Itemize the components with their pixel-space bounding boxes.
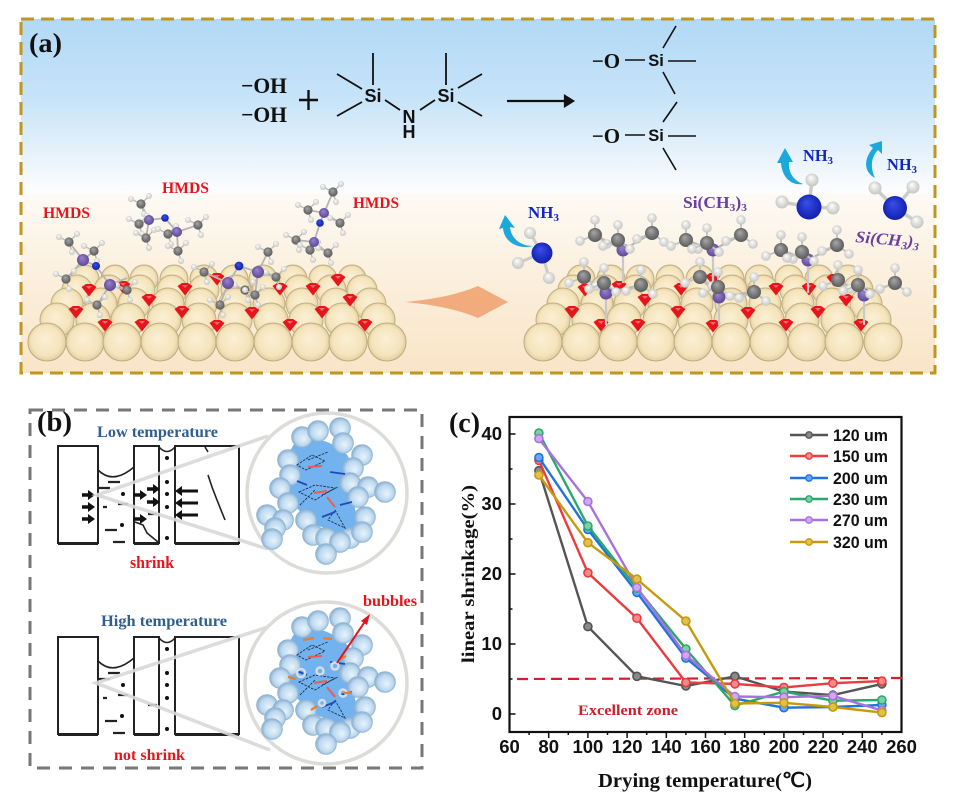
line chart: linear shrinkage vs drying temperature (458, 417, 917, 792)
reaction: HMDS structure: Si (437, 86, 455, 106)
grafted Si(CH3)3 groups, right surface (564, 213, 912, 325)
plot frame and ticks (510, 417, 902, 738)
reaction: surface hydroxyl groups and plus sign: −OH (241, 102, 287, 127)
excellent zone label: Excellent zone (578, 703, 678, 719)
reaction: bonded product structure: Si (648, 127, 664, 145)
y axis numbers: 0 (492, 703, 502, 724)
reaction: bonded product structure: −O (592, 49, 620, 73)
panel a: background and dashed frame (21, 19, 935, 373)
bubbles label: bubbles (363, 593, 417, 610)
NH3 molecule centre (776, 174, 840, 220)
NH3 labels (528, 146, 917, 224)
threshold dashed line (517, 678, 905, 679)
x axis numbers: 200 (768, 736, 799, 757)
Si(CH3)3 label top: ) (735, 193, 741, 212)
reaction: HMDS structure: Si (364, 86, 382, 106)
y axis numbers: 10 (481, 633, 502, 654)
shrink label: shrink (130, 553, 175, 572)
series: 120 um (535, 467, 886, 699)
x axis numbers: 160 (690, 736, 721, 757)
reaction: bonded product structure: Si (648, 52, 664, 70)
x axis numbers: 220 (808, 736, 839, 757)
bubbles arrow (337, 614, 370, 663)
reaction: HMDS structure: N (402, 107, 416, 127)
x axis numbers (499, 736, 917, 757)
series: 150 um (535, 456, 886, 691)
Si(CH3)3 label right: ) (905, 231, 914, 251)
HMDS labels: HMDS (353, 195, 399, 212)
y axis numbers: 40 (481, 423, 502, 444)
series: 230 um (535, 429, 886, 710)
HMDS molecule right (283, 181, 351, 266)
low temperature heading: Low temperature (97, 424, 218, 441)
high temperature heading: High temperature (101, 613, 227, 630)
Si(CH3)3 label top: Si(CH (683, 193, 727, 212)
x axis numbers: 180 (729, 736, 760, 757)
x axis numbers: 240 (847, 736, 878, 757)
reaction: HMDS structure (337, 53, 482, 142)
high temperature magnified particle cluster with bubbles (245, 602, 407, 764)
right substrate slab (524, 265, 902, 361)
Si(CH3)3 label right: 3 (900, 240, 908, 253)
NH3 labels: NH (803, 146, 828, 165)
NH3 labels: NH (528, 203, 553, 222)
HMDS molecule left (53, 231, 138, 318)
chart legend: 200 um (833, 470, 888, 488)
x axis title: Drying temperature(℃) (598, 770, 812, 792)
reaction: bonded product structure: −O (592, 124, 620, 148)
NH3 release arrow left (499, 215, 533, 247)
low temperature pore schematic (58, 446, 239, 544)
chart legend: 320 um (833, 534, 888, 552)
x axis numbers: 80 (538, 736, 559, 757)
reaction arrow (507, 96, 573, 106)
HMDS labels: HMDS (43, 205, 90, 222)
high temperature pore schematic (58, 637, 239, 734)
high temperature magnifier cone (96, 627, 270, 750)
Si(CH3)3 label top: 3 (730, 202, 736, 214)
NH3 molecule right (868, 180, 924, 228)
x axis numbers: 140 (651, 736, 682, 757)
NH3 labels: NH (887, 155, 912, 174)
NH3 molecule left (512, 227, 555, 284)
process arrow (405, 286, 508, 318)
series: 320 um (535, 471, 886, 717)
chart legend: 120 um (833, 427, 888, 445)
y axis numbers: 30 (481, 493, 502, 514)
panel a label: (a) (29, 28, 62, 58)
Si(CH3)3 label right: Si(CH (855, 227, 899, 250)
panel c label: (c) (449, 407, 480, 439)
chart legend: 270 um (833, 512, 888, 530)
chart legend (790, 427, 888, 552)
reaction: surface hydroxyl groups and plus sign: −OH (241, 73, 287, 98)
HMDS labels: HMDS (162, 180, 209, 197)
Si(CH3)3 label right: 3 (911, 241, 920, 254)
HMDS labels (43, 180, 399, 222)
NH3 labels: 3 (828, 155, 833, 167)
low temperature magnified particle cluster (247, 413, 407, 573)
NH3 labels: 3 (912, 164, 917, 176)
panel b label: (b) (37, 406, 72, 438)
reaction: surface hydroxyl groups and plus sign (241, 73, 318, 127)
HMDS molecule top (126, 193, 209, 264)
series: 270 um (535, 435, 886, 714)
NH3 labels: 3 (553, 212, 560, 224)
x axis numbers: 260 (886, 736, 917, 757)
NH3 release arrow right (866, 141, 882, 178)
panel b: dashed frame (30, 410, 422, 768)
series: 200 um (535, 454, 886, 712)
NH3 release arrow centre (777, 148, 803, 184)
Si(CH3)3 label top: 3 (741, 202, 748, 214)
left substrate slab (28, 265, 406, 361)
HMDS molecule on surface (191, 241, 287, 318)
chart legend: 150 um (833, 448, 888, 466)
x axis numbers: 100 (572, 736, 603, 757)
y axis numbers: 20 (481, 563, 502, 584)
x axis numbers: 60 (499, 736, 520, 757)
y axis numbers (481, 423, 502, 724)
x axis numbers: 120 (612, 736, 643, 757)
low temperature magnifier cone (97, 436, 268, 549)
y axis title: linear shrinkage(%) (458, 485, 479, 663)
reaction: bonded product structure (592, 26, 696, 170)
reaction: HMDS structure: H (402, 122, 416, 142)
not shrink label: not shrink (114, 747, 185, 764)
chart legend: 230 um (833, 491, 888, 509)
